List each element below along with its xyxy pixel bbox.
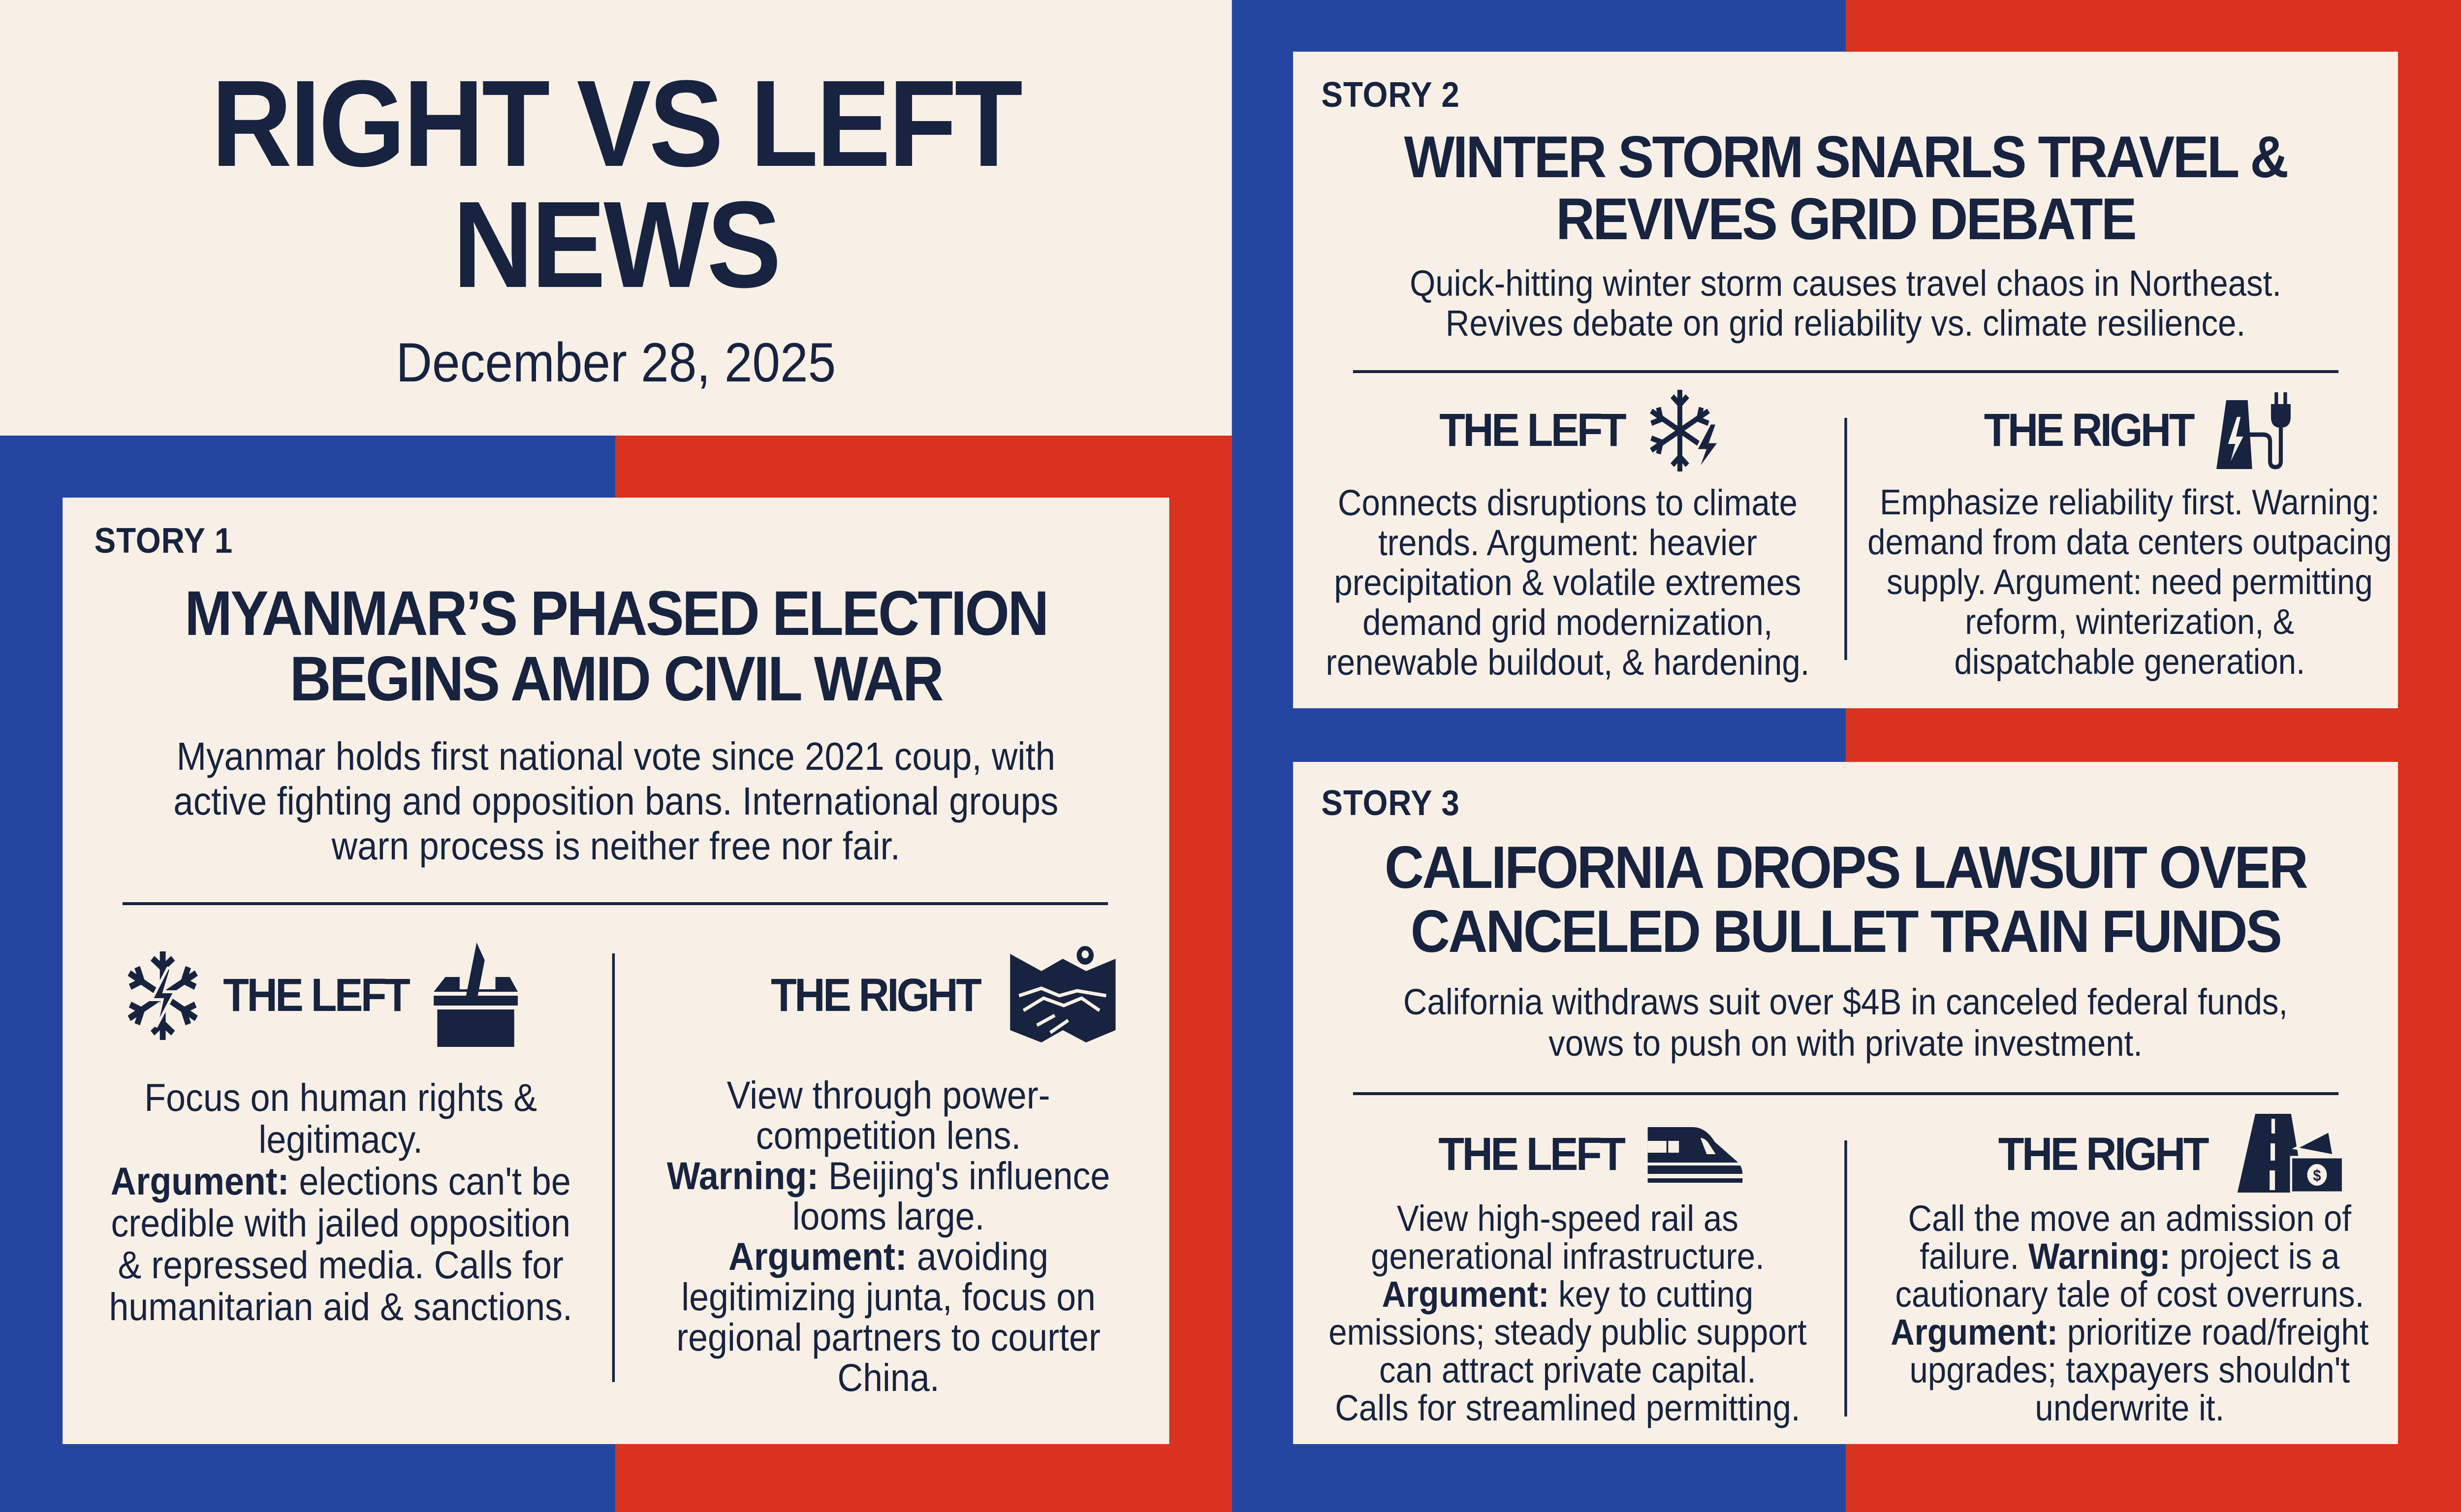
text: right body: [667, 1073, 1110, 1399]
text: left body: legitimacy.: [258, 1117, 423, 1161]
text: right body: [1891, 1198, 2368, 1428]
heading: the right: THE RIGHT: [1998, 1128, 2207, 1180]
title: RIGHT VS LEFT: [211, 55, 1020, 192]
headline: [1404, 124, 2287, 252]
text: right body: Argument: avoiding: [728, 1234, 1048, 1278]
text: right body: [1867, 483, 2392, 682]
headline: [185, 578, 1047, 714]
summary: Quick-hitting winter storm causes travel chaos in Northeast.: [1410, 263, 2281, 304]
summary: Myanmar holds first national vote since 2021 coup, with: [177, 734, 1055, 778]
text: left body: & repressed media. Calls for: [118, 1243, 564, 1287]
text: right body: looms large.: [792, 1194, 984, 1238]
text: left body: Focus on human rights &: [144, 1075, 537, 1119]
headline: WINTER STORM SNARLS TRAVEL &: [1404, 124, 2287, 190]
headline: MYANMAR’S PHASED ELECTION: [185, 578, 1047, 649]
icon: train: [1648, 1127, 1742, 1183]
icon: power plant plug: [2216, 392, 2291, 470]
text: right body: cautionary tale of cost overruns.: [1895, 1274, 2364, 1315]
text: right body: Argument: prioritize road/freight: [1891, 1312, 2368, 1353]
text: right body: reform, winterization, &: [1965, 602, 2294, 642]
text: left body: generational infrastructure.: [1371, 1236, 1765, 1277]
summary: California withdraws suit over $4B in canceled federal funds,: [1403, 981, 2288, 1022]
icon: road and money: $: [2313, 1167, 2321, 1184]
summary: [1403, 981, 2288, 1064]
summary: active fighting and opposition bans. International groups: [173, 779, 1058, 823]
text: left body: [1325, 482, 1809, 683]
text: left body: emissions; steady public support: [1328, 1312, 1807, 1353]
text: left body: Argument: elections can't be: [111, 1159, 571, 1203]
icon: map handshake: [1010, 946, 1115, 1042]
background: left blue: [0, 436, 615, 1512]
text: right body: failure. Warning: project is a: [1920, 1236, 2339, 1277]
text: right body: demand from data centers outpacing: [1867, 523, 2392, 562]
text: right body: supply. Argument: need permitting: [1887, 563, 2373, 602]
panel: story 3: [1293, 762, 2398, 1444]
text: left body: demand grid modernization,: [1362, 602, 1773, 643]
text: left body: View high-speed rail as: [1397, 1198, 1738, 1239]
summary: [173, 734, 1058, 868]
summary: Revives debate on grid reliability vs. climate resilience.: [1446, 303, 2245, 344]
icon: snowflake with bolt: [1650, 390, 1717, 472]
icon: road and money: [2238, 1114, 2343, 1193]
summary: warn process is neither free nor fair.: [332, 824, 900, 868]
headline: CALIFORNIA DROPS LAWSUIT OVER: [1385, 834, 2306, 901]
background: right red: [1846, 0, 2461, 1512]
text: left body: renewable buildout, & hardening.: [1325, 642, 1809, 683]
text: left body: can attract private capital.: [1379, 1350, 1756, 1390]
date: December 28, 2025: [396, 332, 836, 393]
heading: the right: THE RIGHT: [1984, 404, 2193, 456]
text: right body: Emphasize reliability first. Warning:: [1880, 483, 2380, 522]
panel: story 1: [63, 498, 1169, 1444]
title: NEWS: [453, 176, 779, 313]
story label: STORY 3: [1321, 784, 1460, 823]
text: left body: credible with jailed opposition: [111, 1201, 570, 1245]
title: [211, 55, 1022, 313]
text: left body: [1328, 1198, 1807, 1428]
text: right body: dispatchable generation.: [1954, 642, 2305, 682]
background: right blue: [1232, 0, 1846, 1512]
text: right body: legitimizing junta, focus on: [681, 1275, 1096, 1319]
text: right body: China.: [837, 1355, 940, 1399]
summary: [1410, 263, 2281, 344]
text: right body: competition lens.: [756, 1113, 1021, 1157]
text: right body: Warning: Beijing's influence: [667, 1154, 1110, 1197]
story label: STORY 1: [95, 521, 233, 561]
heading: the left: THE LEFT: [1439, 404, 1624, 456]
text: right body: underwrite it.: [2035, 1387, 2224, 1428]
background: left red: [615, 436, 1232, 1512]
icon: ballot box: [434, 943, 518, 1047]
text: right body: regional partners to courter: [676, 1315, 1101, 1359]
text: right body: Call the move an admission of: [1908, 1198, 2351, 1239]
text: left body: Argument: key to cutting: [1382, 1274, 1753, 1315]
heading: the left: THE LEFT: [1438, 1128, 1623, 1180]
headline: REVIVES GRID DEBATE: [1556, 186, 2135, 252]
story label: STORY 2: [1321, 75, 1460, 115]
text: left body: [109, 1075, 572, 1328]
text: left body: Connects disruptions to climate: [1338, 482, 1798, 523]
text: right body: View through power-: [727, 1073, 1050, 1117]
headline: [1385, 834, 2307, 965]
heading: the right: THE RIGHT: [771, 969, 979, 1021]
text: left body: Calls for streamlined permitting.: [1335, 1387, 1800, 1428]
summary: vows to push on with private investment.: [1548, 1023, 2143, 1064]
headline: CANCELED BULLET TRAIN FUNDS: [1411, 898, 2280, 965]
text: left body: precipitation & volatile extremes: [1334, 562, 1801, 603]
text: left body: humanitarian aid & sanctions.: [109, 1285, 572, 1328]
text: right body: upgrades; taxpayers shouldn't: [1909, 1350, 2350, 1390]
headline: BEGINS AMID CIVIL WAR: [290, 644, 942, 714]
panel: story 2: [1293, 52, 2398, 708]
heading: the left: THE LEFT: [223, 969, 408, 1021]
icon: snowflake bolt: [128, 951, 198, 1040]
text: left body: trends. Argument: heavier: [1378, 522, 1757, 563]
